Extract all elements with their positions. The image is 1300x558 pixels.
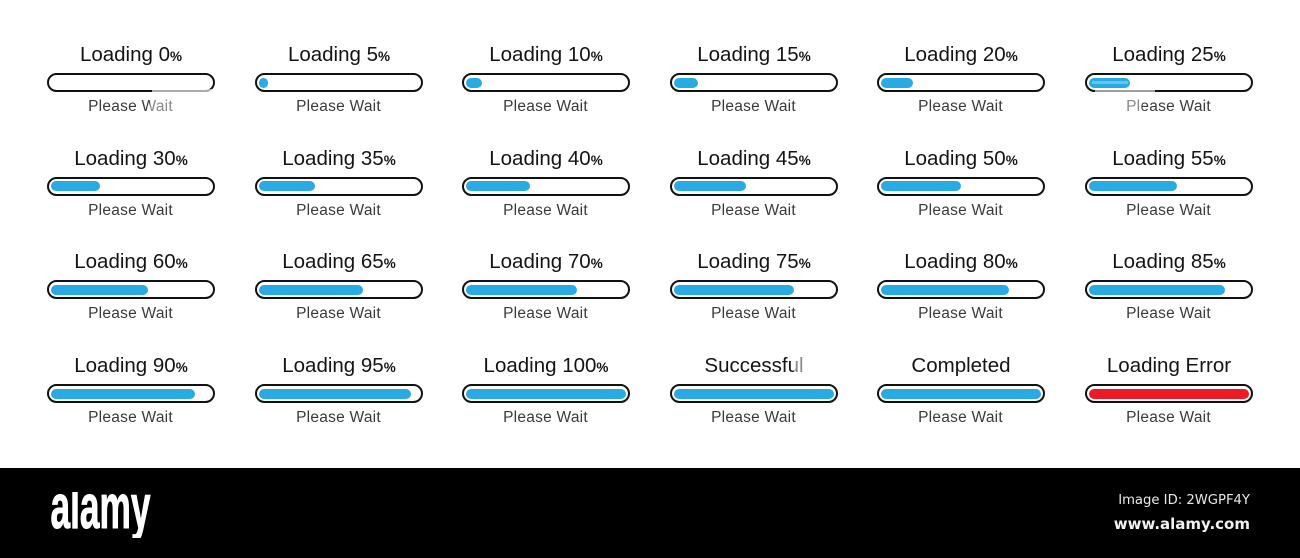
progress bar	[1085, 73, 1253, 92]
heading: Loading 20%	[904, 43, 1018, 66]
caption: Please Wait	[1126, 98, 1211, 115]
caption: Please Wait	[503, 202, 588, 218]
progress bar	[670, 176, 838, 196]
heading: Loading 65%	[282, 250, 396, 273]
caption: Please Wait	[88, 409, 173, 426]
caption: Please Wait	[711, 98, 796, 115]
loader: Loading 45%	[670, 146, 838, 218]
loader: Loading Error	[1085, 351, 1253, 429]
loader: Loading 40%	[462, 146, 630, 218]
progress bar	[255, 176, 423, 196]
heading: Loading 10%	[489, 43, 603, 66]
loader: Loading 65%	[255, 250, 423, 322]
loader: Loading 60%	[47, 250, 215, 322]
progress bar	[1085, 176, 1253, 196]
progress bar	[47, 176, 215, 196]
image id: Image ID: 2WGPF4Y	[1118, 493, 1250, 508]
heading: Loading 50%	[904, 146, 1018, 170]
heading: Loading 100%	[484, 354, 608, 377]
loader: Loading 35%	[255, 146, 423, 218]
heading: Loading 45%	[697, 146, 811, 170]
caption: Please Wait	[296, 409, 381, 426]
website: www.alamy.com	[1114, 515, 1250, 533]
loader: Loading 100%	[462, 351, 630, 429]
caption: Please Wait	[918, 98, 1003, 115]
heading: Loading 15%	[697, 43, 811, 66]
progress bar	[877, 176, 1045, 196]
loader: Completed	[877, 351, 1045, 429]
loader: Loading 95%	[255, 354, 423, 426]
loader: Loading 90%	[47, 354, 215, 426]
caption: Please Wait	[296, 305, 381, 322]
heading: Loading 25%	[1112, 43, 1226, 66]
heading: Loading 55%	[1112, 146, 1226, 170]
heading: Loading 95%	[282, 354, 396, 377]
loader: Successful	[670, 351, 838, 429]
heading: Loading 80%	[904, 250, 1018, 273]
progress bar	[670, 73, 838, 92]
heading: Loading 35%	[282, 146, 396, 170]
loader: Loading 85%	[1085, 250, 1253, 322]
caption: Please Wait	[1126, 409, 1211, 426]
heading: Loading 85%	[1112, 250, 1226, 273]
progress bar	[462, 384, 630, 403]
progress bar	[1085, 280, 1253, 299]
progress bar	[255, 384, 423, 403]
heading: Loading 70%	[489, 250, 603, 273]
progress bar	[877, 280, 1045, 299]
loader: Loading 30%	[47, 146, 215, 218]
loader: Loading 75%	[670, 250, 838, 322]
heading: Loading Error	[1107, 354, 1231, 377]
loader: Loading 5%	[255, 43, 423, 115]
heading: Successful	[704, 354, 804, 377]
heading: Loading 90%	[74, 354, 188, 377]
caption: Please Wait	[918, 202, 1003, 218]
caption: Please Wait	[296, 202, 381, 218]
caption: Please Wait	[503, 409, 588, 426]
heading: Loading 0%	[80, 43, 182, 66]
caption: Please Wait	[88, 202, 173, 218]
progress bar	[462, 280, 630, 299]
progress bar	[255, 280, 423, 299]
progress bar	[670, 280, 838, 299]
caption: Please Wait	[918, 409, 1003, 426]
progress bar	[877, 384, 1045, 403]
heading: Loading 40%	[489, 146, 603, 170]
loader: Loading 10%	[462, 43, 630, 115]
progress bar	[47, 73, 215, 92]
progress bar	[877, 73, 1045, 92]
caption: Please Wait	[503, 305, 588, 322]
loader: Loading 25%	[1085, 43, 1253, 115]
progress bar	[47, 384, 215, 403]
caption: Please Wait	[1126, 202, 1211, 218]
loader: Loading 15%	[670, 43, 838, 115]
caption: Please Wait	[88, 98, 173, 115]
heading: Completed	[911, 354, 1011, 377]
loader: Loading 50%	[877, 146, 1045, 218]
heading: Loading 60%	[74, 250, 188, 273]
loader: Loading 20%	[877, 43, 1045, 115]
loader: Loading 0%	[47, 43, 215, 115]
caption: Please Wait	[918, 305, 1003, 322]
caption: Please Wait	[503, 98, 588, 115]
heading: Loading 30%	[74, 146, 188, 170]
progress bar	[462, 73, 630, 92]
loader: Loading 80%	[877, 250, 1045, 322]
caption: Please Wait	[296, 98, 381, 115]
progress bar: error	[1085, 384, 1253, 403]
footer band	[0, 468, 1300, 558]
progress bar	[670, 384, 838, 403]
progress bar	[47, 280, 215, 299]
heading: Loading 5%	[288, 43, 390, 66]
caption: Please Wait	[711, 409, 796, 426]
loader: Loading 70%	[462, 250, 630, 322]
progress bar	[462, 176, 630, 196]
caption: Please Wait	[88, 305, 173, 322]
heading: Loading 75%	[697, 250, 811, 273]
caption: Please Wait	[1126, 305, 1211, 322]
caption: Please Wait	[711, 305, 796, 322]
progress bar	[255, 73, 423, 92]
loader: Loading 55%	[1085, 146, 1253, 218]
caption: Please Wait	[711, 202, 796, 218]
